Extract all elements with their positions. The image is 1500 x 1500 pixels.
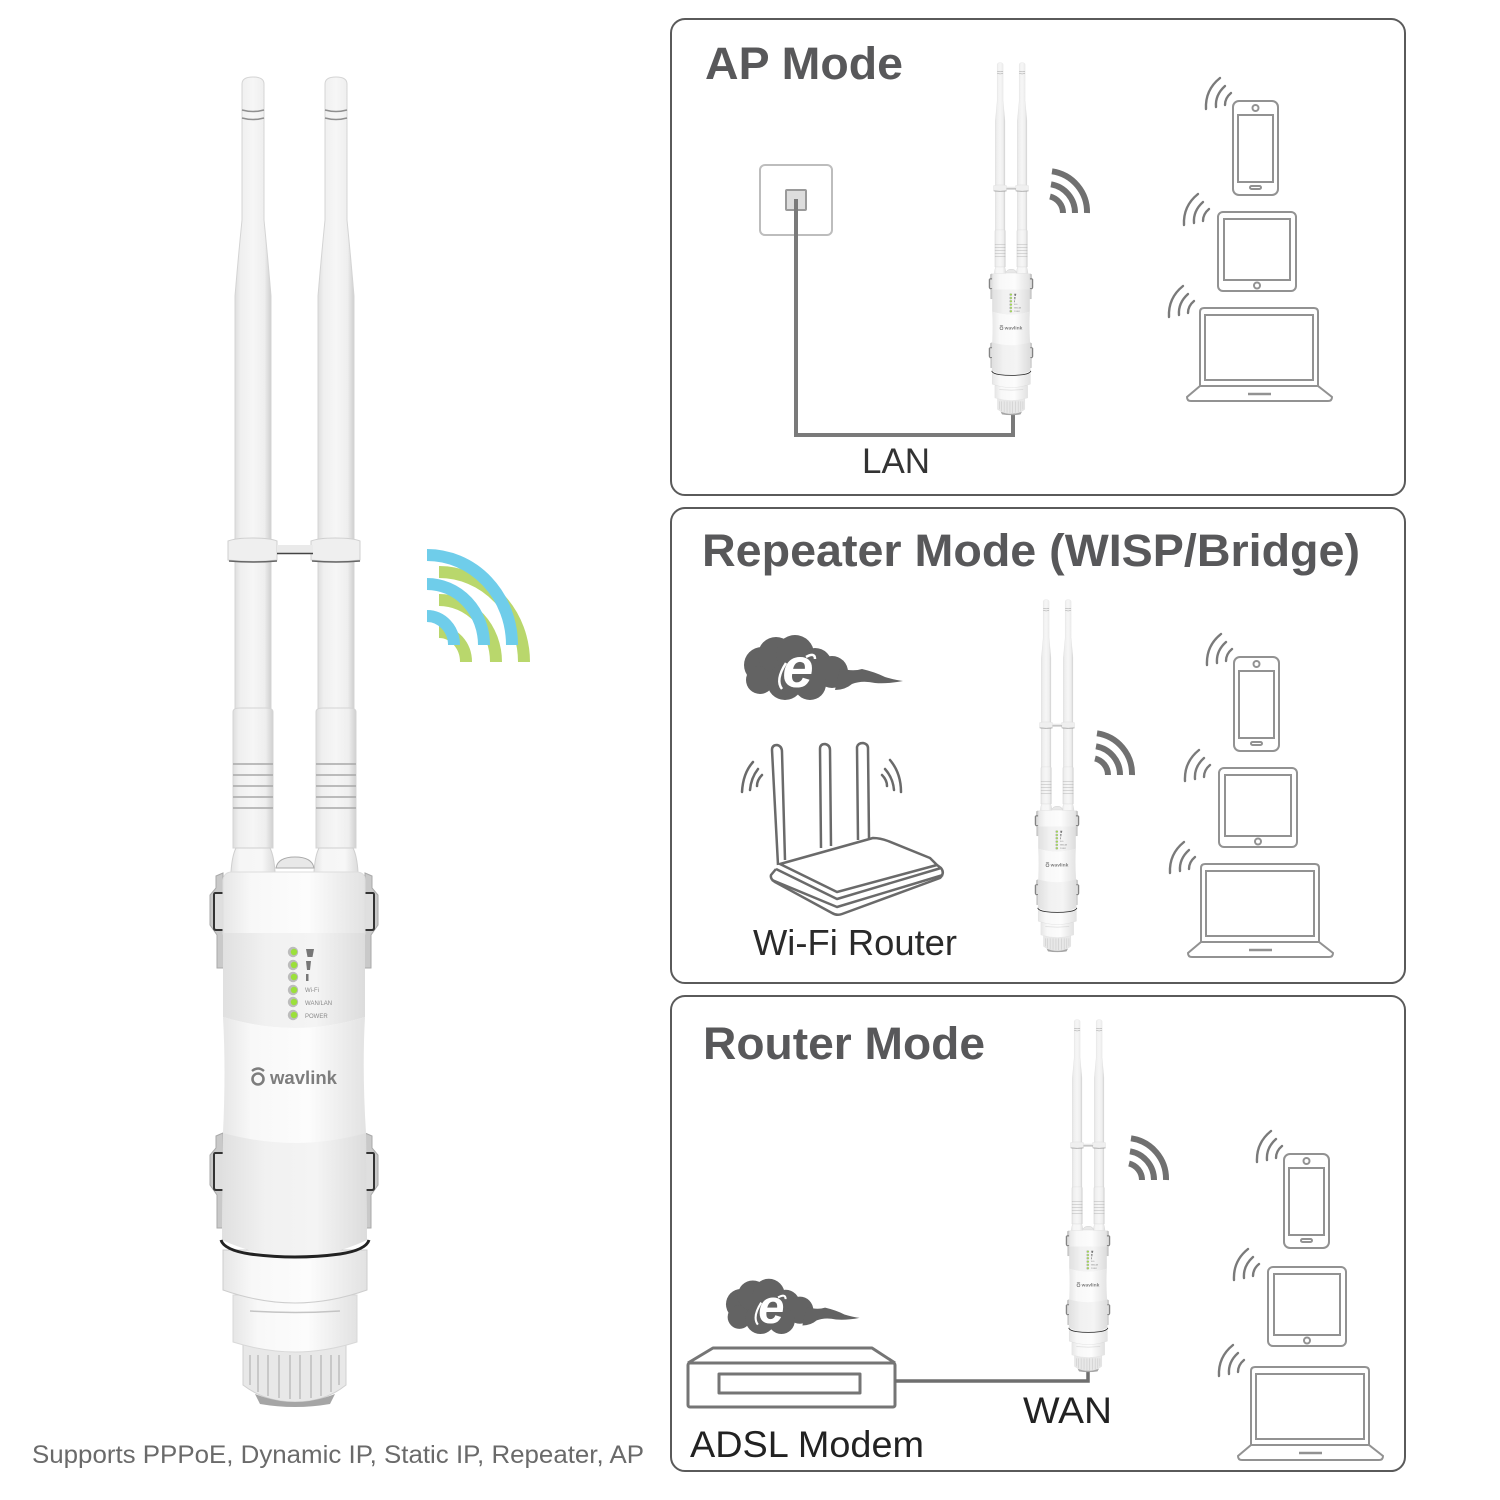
green arcs [439, 572, 524, 662]
icons: phone tablet laptop [1219, 1131, 1383, 1460]
label: ADSL Modem: ADSL Modem [690, 1424, 924, 1465]
icon: internet cloud [744, 635, 903, 700]
heading: Repeater Mode: Repeater Mode (WISP/Bridge) [702, 525, 1360, 576]
device: repeater [1035, 600, 1079, 952]
product: outdoor access point [210, 77, 378, 1407]
heading: AP Mode: AP Mode [705, 38, 903, 89]
panel: router mode [671, 996, 1405, 1471]
label: LAN: LAN [862, 442, 930, 481]
heading: Router Mode: Router Mode [703, 1018, 985, 1069]
icon: Wi-Fi router [742, 743, 943, 915]
cable: WAN [895, 1365, 1088, 1381]
icon: wall LAN socket [760, 165, 832, 235]
icon: wireless signal [1129, 1138, 1166, 1180]
caption: Supports PPPoE, Dynamic IP, Static IP, Repeater, AP [32, 1441, 644, 1469]
icon: ADSL modem [688, 1348, 895, 1407]
panel: AP mode [671, 19, 1405, 495]
device: access point [989, 63, 1033, 415]
icons: phone tablet laptop [1170, 634, 1333, 957]
label: WAN: WAN [1023, 1390, 1112, 1431]
icon: wireless signal [1050, 171, 1087, 213]
blue arcs [427, 555, 512, 645]
icon: wireless signal [1095, 733, 1132, 775]
icons: phone tablet laptop [1169, 78, 1332, 401]
cable: LAN [796, 199, 1013, 435]
icon: internet cloud [726, 1279, 860, 1334]
device: router [1066, 1020, 1110, 1372]
panel: repeater mode [671, 508, 1405, 983]
label: Wi-Fi Router: Wi-Fi Router [753, 922, 957, 963]
icon: coloured Wi-Fi signal [427, 555, 524, 662]
